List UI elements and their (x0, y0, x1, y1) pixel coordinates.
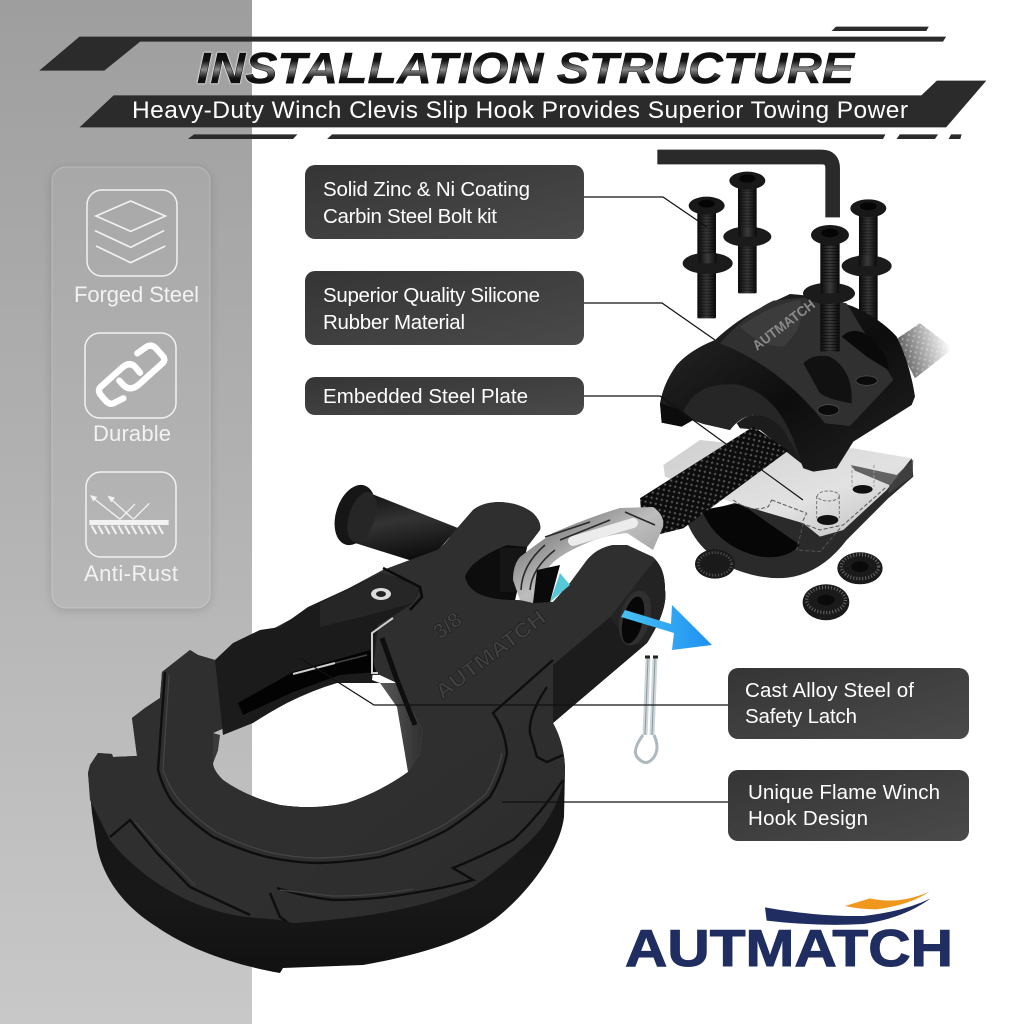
subtitle: Heavy-Duty Winch Clevis Slip Hook Provides Superior Towing Power (132, 97, 908, 124)
braided rope sheath (640, 427, 788, 538)
logo: autmatch (625, 892, 953, 978)
raised ridge lines (110, 638, 563, 922)
callout: silicone rubber: Superior Quality Silicone (323, 284, 540, 307)
callout: silicone rubber: Rubber Material (323, 311, 465, 334)
banner graphic stripes (39, 27, 986, 139)
winch hook (88, 296, 818, 973)
label: anti-rust: Anti-Rust (84, 561, 178, 586)
rope tail fading out (895, 323, 955, 380)
callout: flame design: Unique Flame Winch (748, 781, 940, 804)
embossed logo on clamp: AUTMATCH (749, 296, 818, 353)
label: durable: Durable (93, 421, 171, 446)
logo wordmark: AUTMATCH (625, 920, 953, 978)
safety latch (215, 568, 422, 735)
icon: hex key (657, 157, 833, 217)
panel background (52, 167, 210, 608)
callout: safety latch: Cast Alloy Steel of (745, 679, 914, 702)
icon: anti-rust surface (86, 472, 176, 557)
teal reflection (550, 573, 570, 602)
logo swoosh (765, 892, 931, 925)
icon: durable chain link (85, 333, 176, 418)
callout: safety latch (728, 668, 969, 739)
callout: steel plate (305, 377, 584, 415)
clevis pin (327, 480, 458, 565)
label: forged steel: Forged Steel (74, 282, 199, 307)
callout: flame design: Hook Design (748, 807, 868, 830)
arch interior behind rope (737, 415, 803, 465)
panel: feature icons (52, 167, 210, 608)
inner wall slivers (213, 683, 423, 772)
callout: silicone rubber (305, 271, 584, 345)
icon: forged steel layers (87, 190, 177, 276)
title banner (39, 27, 986, 139)
blue direction arrow (621, 605, 712, 650)
rope eye loop (513, 507, 663, 603)
shank shadow side and eye (465, 545, 665, 723)
hook top face (88, 502, 665, 923)
callout: bolt kit: Solid Zinc & Ni Coating (323, 178, 530, 201)
leader lines (300, 197, 803, 802)
upper clamp: silicone rubber (660, 294, 915, 472)
callout: steel plate: Embedded Steel Plate (323, 385, 528, 408)
embossed size text: 3/8 (429, 608, 467, 644)
cotter pin (635, 657, 658, 762)
bolt kit (683, 172, 892, 321)
lower clamp and steel plate (663, 440, 913, 578)
title: installation structure: INSTALLATION STRUCTURE (197, 44, 856, 93)
front bolt through clamp (803, 225, 855, 352)
hook body silhouette (88, 502, 665, 973)
embossed brand text on hook: AUTMATCH (431, 606, 550, 704)
background: grey left strip (0, 0, 252, 1024)
flange nuts (695, 549, 883, 620)
exploded parts: bolts, clamp, plate, rope (640, 157, 955, 620)
callout: flame design (728, 770, 969, 841)
callout: bolt kit (305, 165, 584, 239)
callout: safety latch: Safety Latch (745, 705, 857, 728)
callout: bolt kit: Carbin Steel Bolt kit (323, 205, 497, 228)
